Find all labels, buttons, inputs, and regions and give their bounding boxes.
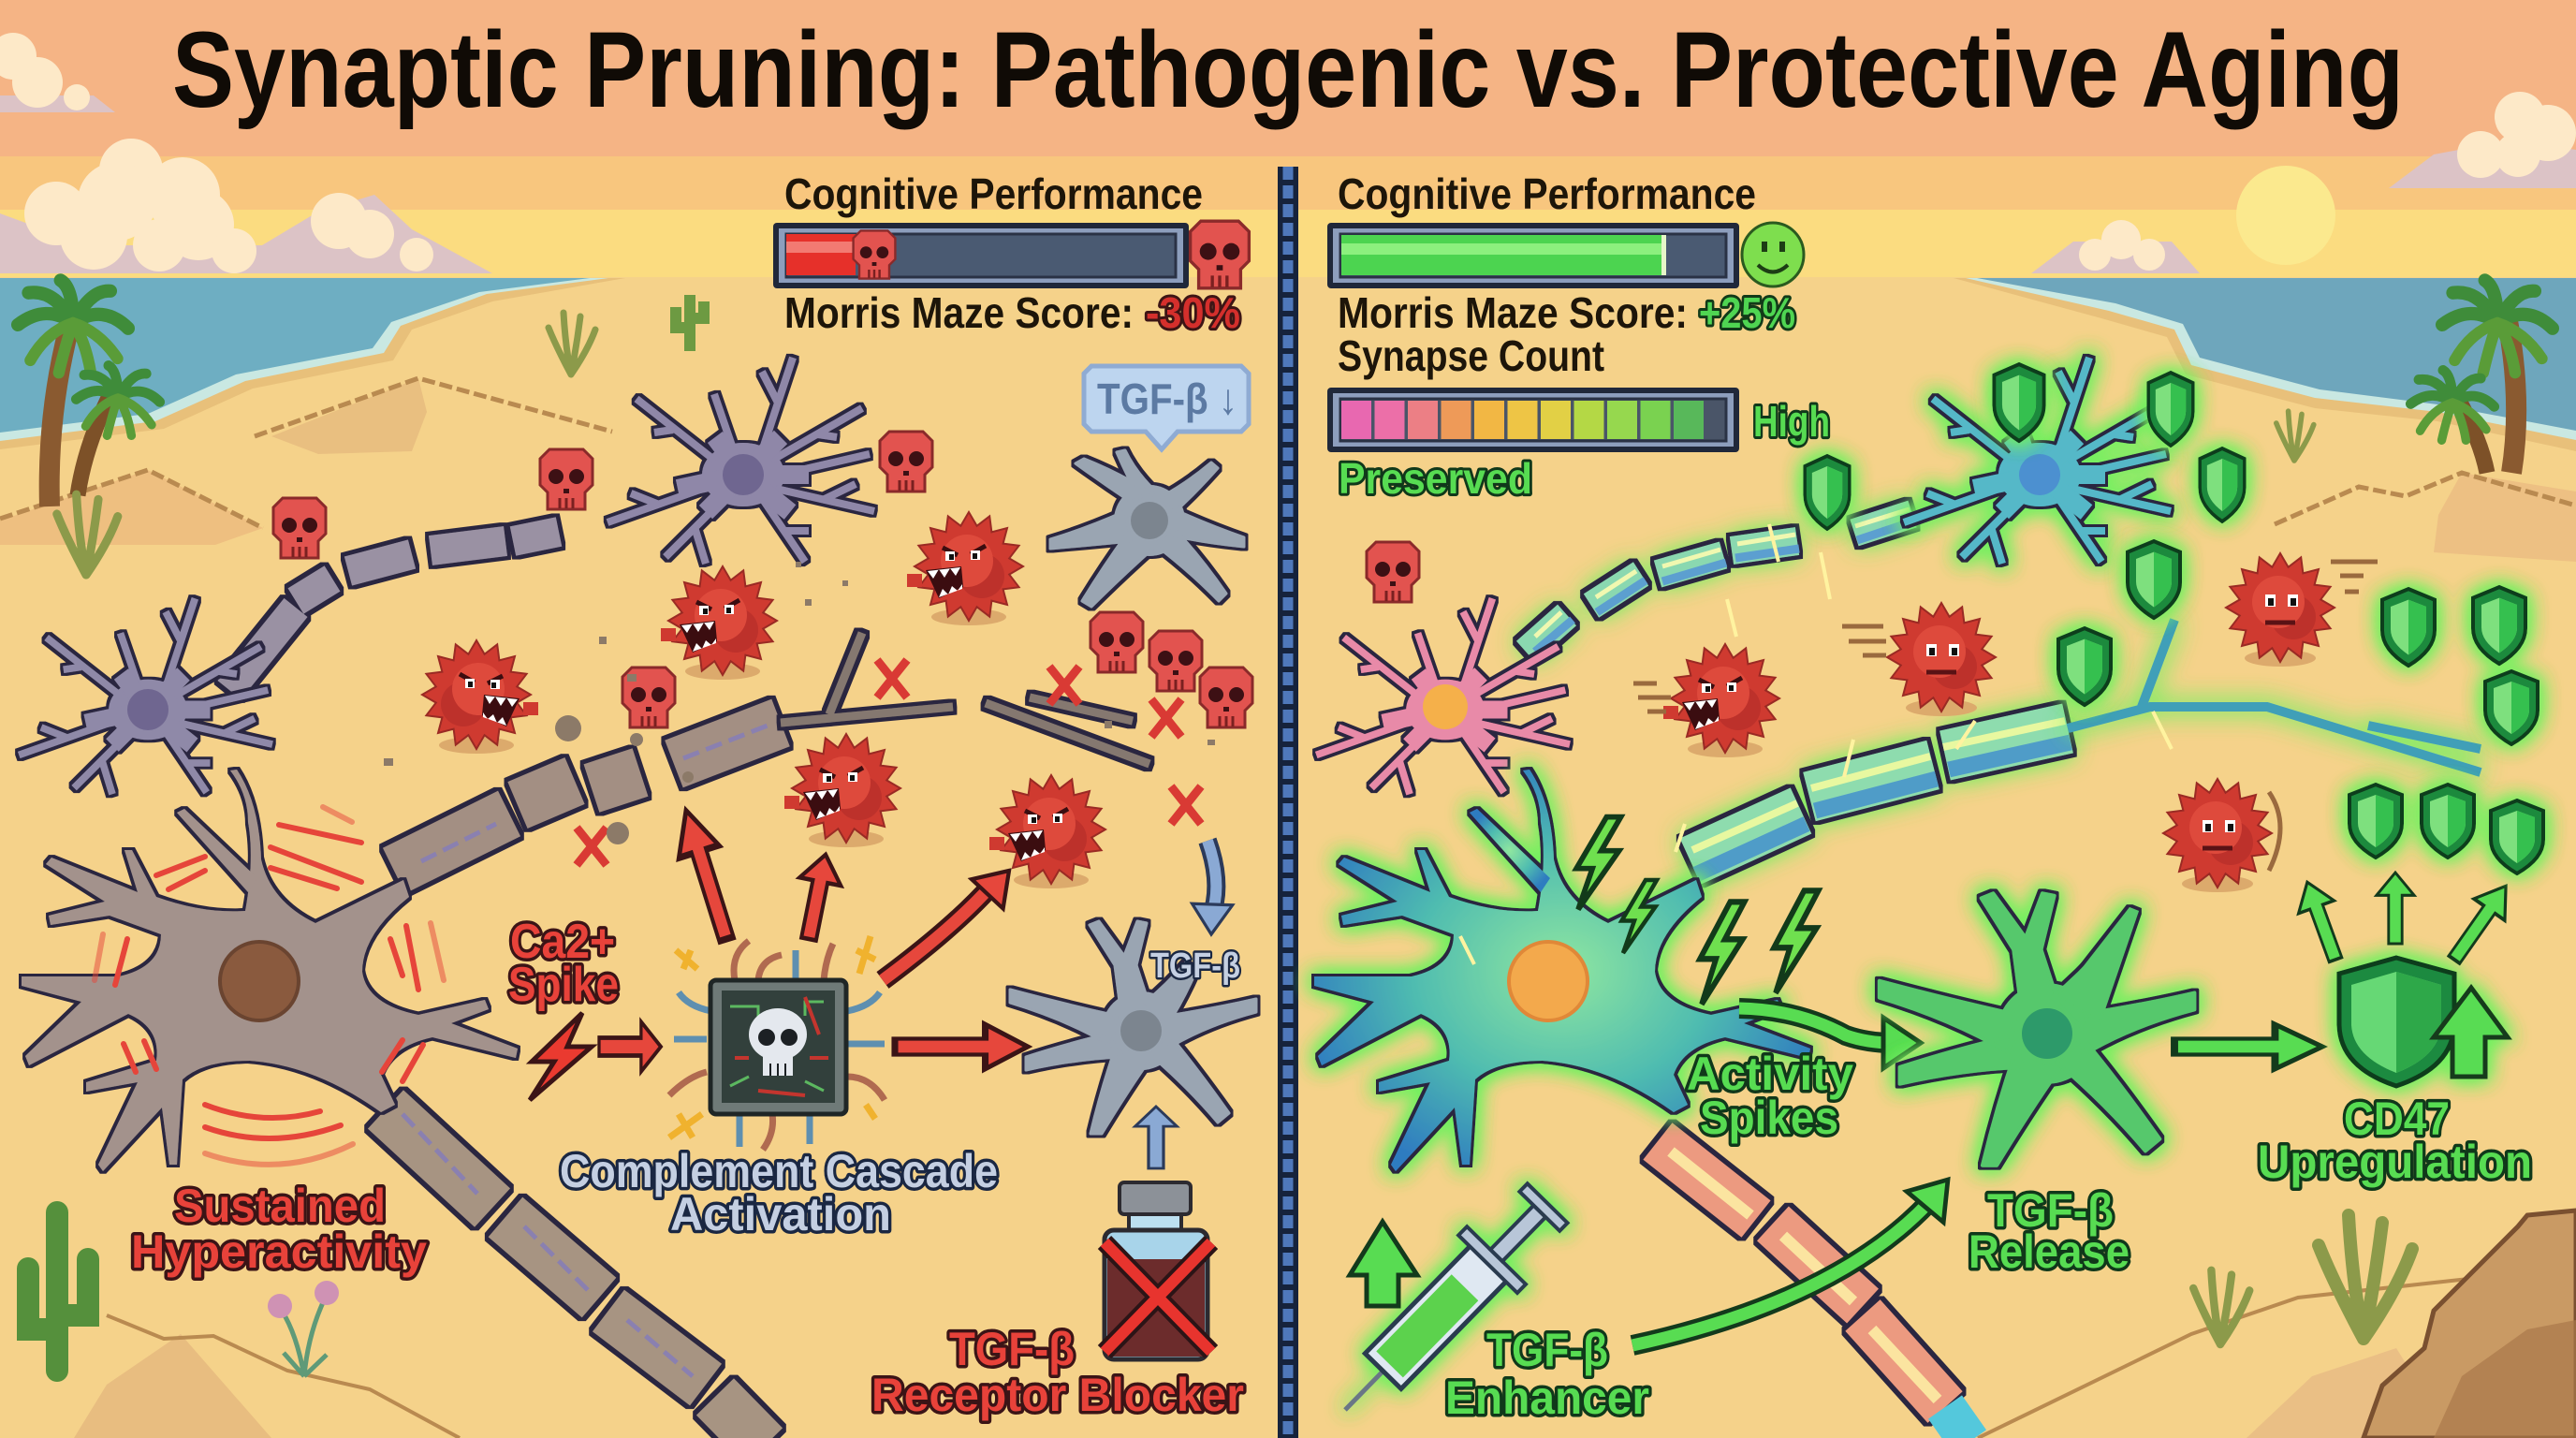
protected axon glow [1690, 728, 2068, 861]
skull [1367, 542, 1419, 602]
panel: protective aging [1314, 169, 2543, 1438]
hyperactivity waves [95, 807, 444, 1165]
heading: Cognitive Performance [784, 169, 1203, 218]
neuron nucleus [1509, 942, 1588, 1020]
skull icon [1191, 221, 1249, 288]
sparks [1460, 524, 2172, 964]
icon: red lightning [530, 1013, 592, 1100]
label: Sustained Hyperactivity: Sustained [174, 1180, 386, 1232]
score value: -30% [1146, 288, 1240, 337]
label: CD47 Upregulation: Upregulation [2258, 1136, 2532, 1188]
label: Activity Spikes: Spikes [1700, 1092, 1838, 1144]
upper right healthy axon [1526, 509, 1913, 652]
debris [384, 562, 1215, 844]
heading: Cognitive Performance [1338, 169, 1756, 218]
arrow: spike to chip [599, 1021, 661, 1072]
score label: Morris Maze Score: [1338, 288, 1688, 337]
label: Complement Cascade Activation: Complement Cascade [560, 1145, 998, 1197]
palm trees and desert plants [18, 280, 2576, 1438]
synapse bar [1327, 388, 1739, 452]
label: TGF-beta Enhancer: TGF-β [1486, 1324, 1608, 1376]
label: TGF-beta Release: TGF-β [1987, 1184, 2114, 1237]
damaged neuron top [607, 358, 874, 564]
TGF-beta down bubble: TGF-β ↓ [1097, 374, 1237, 423]
score value: +25% [1699, 288, 1795, 337]
complement microglia monsters [422, 512, 1105, 888]
gray astrocyte top [1050, 450, 1244, 607]
icon: complement chip [669, 936, 885, 1150]
label: Preserved: Preserved [1339, 454, 1532, 503]
axon veins [402, 726, 768, 1376]
label: TGF-beta Receptor Blocker [871, 1323, 1244, 1421]
label: CD47 Upregulation [2258, 1093, 2532, 1188]
lightning bolts: activity [1576, 817, 1819, 1005]
main healthy neuron [1314, 770, 1810, 1171]
motion lines [1633, 562, 2378, 871]
score label: Morris Maze Score: [784, 288, 1134, 337]
skull marker [854, 230, 895, 279]
astrocyte nuclei [1120, 502, 1168, 1051]
synapse count heading: Synapse Count [1338, 331, 1604, 380]
label: Ca2+ Spike: Spike [508, 958, 619, 1012]
protective shields [1805, 364, 2543, 873]
nuclei of damaged neurons [127, 454, 764, 730]
label: Sustained Hyperactivity: Hyperactivity [131, 1225, 427, 1278]
damaged neuron lower-left [19, 598, 272, 794]
healthy neuron nucleus [2019, 454, 2060, 495]
icon: blocked vial [1105, 1182, 1211, 1359]
label: CD47 Upregulation: CD47 [2344, 1093, 2450, 1145]
label: TGF-beta Release [1969, 1184, 2130, 1278]
pink neuron [1316, 598, 1570, 794]
green astrocyte [1880, 893, 2194, 1166]
cognitive performance and synapse readout [1327, 169, 1830, 503]
label: TGF-beta: TGF-β [1150, 946, 1240, 986]
performance bar [1327, 223, 1739, 288]
repelled microglia monsters [1663, 553, 2334, 892]
label: TGF-beta Receptor Blocker: Receptor Blocker [871, 1369, 1244, 1421]
label: Ca2+ Spike: Ca2+ [510, 915, 615, 969]
neuron nucleus [220, 942, 299, 1020]
main axon toward upper right [394, 723, 781, 871]
pink neuron nucleus [1423, 684, 1468, 729]
red X marks [577, 660, 1201, 865]
label: Ca2+ Spike [508, 915, 619, 1012]
astrocyte nucleus [2022, 1008, 2072, 1059]
label: Complement Cascade Activation [560, 1145, 998, 1240]
up arrow: enhancer [1350, 1222, 1417, 1306]
label: TGF-beta Enhancer [1445, 1324, 1649, 1424]
blue arrow up to astrocyte [1135, 1107, 1177, 1168]
icon: CD47 shield with up arrow [2339, 958, 2508, 1086]
pruned axon branches [781, 633, 1149, 764]
label: TGF-beta Receptor Blocker: TGF-β [949, 1323, 1075, 1375]
arrow: enhancer to astrocyte [1632, 1165, 1967, 1345]
death skulls [273, 432, 1252, 727]
label: High: High [1753, 397, 1830, 446]
label: TGF-beta Enhancer: Enhancer [1445, 1372, 1649, 1424]
TGF-beta down bubble [1084, 366, 1249, 449]
label: Complement Cascade Activation: Activation [670, 1188, 891, 1240]
panel: pathogenic aging [19, 169, 1256, 1438]
label: TGF-beta Release: Release [1969, 1225, 2130, 1278]
label: Activity Spikes: Activity [1687, 1048, 1853, 1100]
protected axon [1690, 721, 2071, 874]
arrow: astrocyte to CD47 [2174, 1024, 2322, 1069]
upper-left damaged axon [229, 532, 559, 690]
arrows to shields [2290, 873, 2522, 971]
axon branches with glow [2068, 620, 2481, 772]
blue arrow down [1191, 841, 1233, 935]
lower axon [386, 1109, 764, 1438]
lower rainbow axon [1658, 1141, 1945, 1407]
performance bar [773, 223, 1189, 288]
healthy neuron top [1904, 358, 2171, 564]
gray astrocyte bottom [1010, 921, 1256, 1134]
label: Sustained Hyperactivity [131, 1180, 427, 1278]
arrow: activity to astrocyte [1739, 1008, 1921, 1068]
cognitive performance readout [773, 169, 1249, 337]
panel divider [1278, 167, 1298, 1438]
syringe with TGF-beta enhancer [1316, 1174, 1577, 1438]
main hyperactive neuron [22, 770, 518, 1171]
arrows from chip [666, 804, 1028, 1069]
smiley icon [1742, 223, 1804, 286]
label: Activity Spikes [1687, 1048, 1853, 1144]
